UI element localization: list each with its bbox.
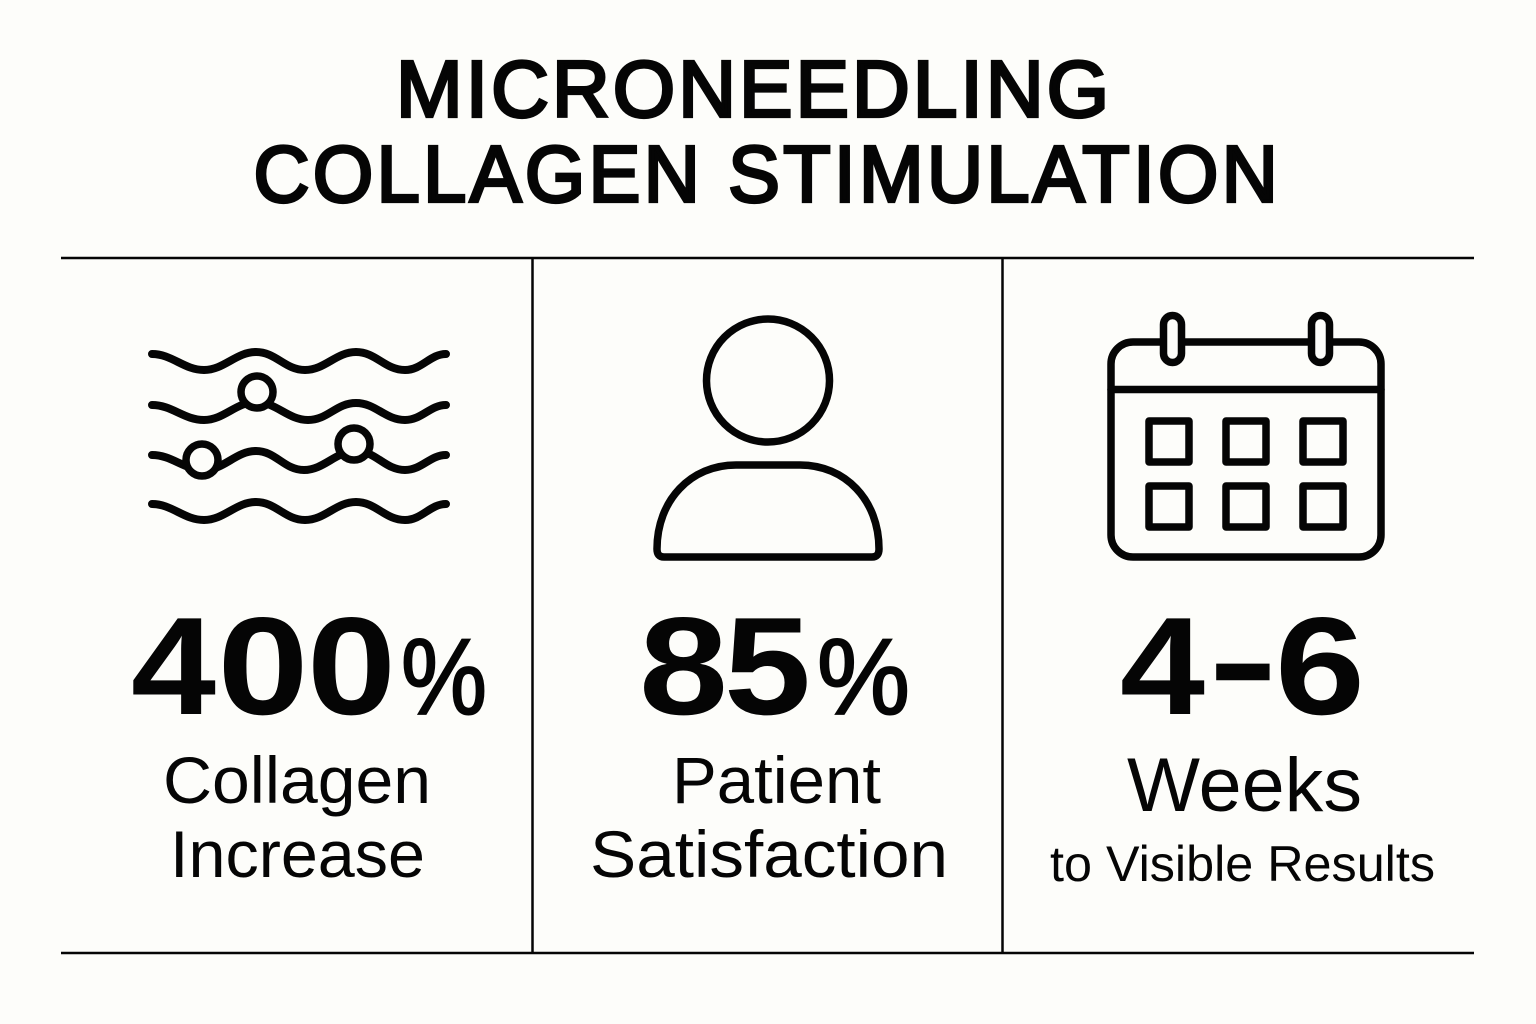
stat: 4-6: 4 xyxy=(1120,589,1205,744)
icon: collagen waves xyxy=(152,352,446,520)
label: collagen increase xyxy=(163,743,431,891)
title xyxy=(254,44,1278,219)
panel: weeks to results xyxy=(1050,316,1435,892)
stat: 400%: 0 xyxy=(307,589,396,744)
label: patient satisfaction: Satisfaction xyxy=(590,817,948,891)
stat: 85% xyxy=(639,589,910,744)
stat: 400%: 4 xyxy=(131,589,216,744)
panel: collagen increase xyxy=(131,352,487,891)
icon: calendar xyxy=(1111,316,1381,557)
stat: 4-6: - xyxy=(1208,583,1278,738)
stat: 4-6: 6 xyxy=(1275,589,1365,744)
label: patient satisfaction xyxy=(590,743,948,891)
label: weeks to visible results xyxy=(1050,743,1435,892)
title: MICRONEEDLING xyxy=(396,44,1109,134)
stat: 400% xyxy=(131,589,487,744)
label: collagen increase: Collagen xyxy=(163,743,431,817)
icon: person xyxy=(657,319,879,557)
stat: 85%: % xyxy=(817,616,910,737)
stat: 85%: 5 xyxy=(724,589,811,744)
label: weeks to visible results: Weeks xyxy=(1127,743,1362,828)
stat: 400%: % xyxy=(401,616,487,737)
label: weeks to visible results: to Visible Results xyxy=(1050,836,1435,892)
label: patient satisfaction: Patient xyxy=(672,743,881,817)
panel: patient satisfaction xyxy=(590,319,948,891)
stat: 400%: 0 xyxy=(218,589,308,744)
title: COLLAGEN STIMULATION xyxy=(254,129,1278,219)
label: collagen increase: Increase xyxy=(170,817,425,891)
stat: 85%: 8 xyxy=(639,589,728,744)
